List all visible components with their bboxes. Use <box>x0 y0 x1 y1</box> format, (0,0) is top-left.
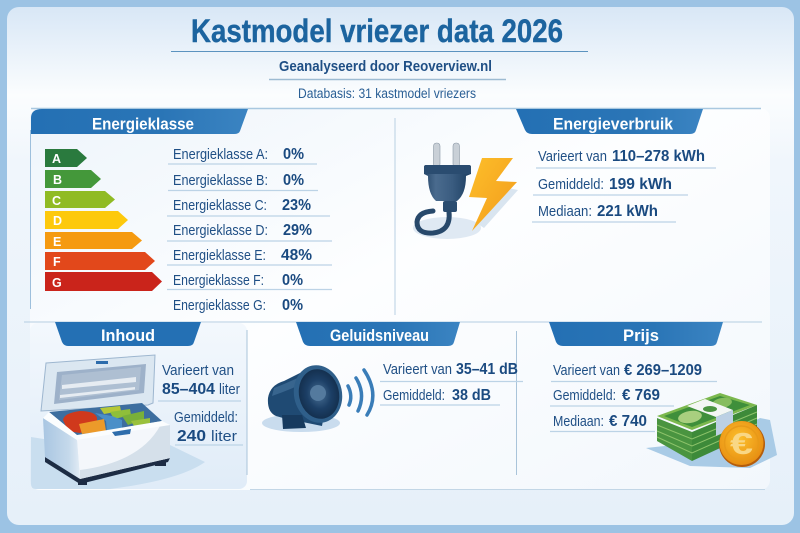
panel: Energieverbruik <box>413 109 716 239</box>
energy class rows: Energieklasse G: <box>173 298 266 314</box>
energy class rows: 0% <box>282 272 303 289</box>
capacity stats: Varieert van <box>162 363 234 379</box>
energy consumption stats: Mediaan: <box>538 204 592 220</box>
energy class rows: Energieklasse E: <box>173 248 266 264</box>
energy consumption stats: 221 kWh <box>597 203 658 220</box>
icon: plug and lightning bolt <box>413 143 518 239</box>
icon: speaker with sound waves <box>262 361 373 432</box>
subtitle: Geanalyseerd door Reoverview.nl <box>279 58 492 75</box>
tab: Inhoud: Inhoud <box>101 326 155 345</box>
energy class rows: Energieklasse A: <box>173 147 268 163</box>
tab: Energieklasse <box>31 109 248 134</box>
icon: chest freezer <box>31 355 205 489</box>
energy class rows: Energieklasse F: <box>173 273 264 289</box>
energy consumption stats <box>532 148 716 222</box>
capacity stats: liter <box>219 382 240 398</box>
energy label arrows: C <box>52 194 61 208</box>
tab: Inhoud <box>55 322 201 346</box>
price stats <box>550 362 717 432</box>
tab: Energieverbruik <box>516 109 703 134</box>
energy consumption stats: 110–278 kWh <box>612 148 705 165</box>
price stats: Varieert van <box>553 363 620 379</box>
icon: banknotes and euro coin: € <box>730 426 753 461</box>
tab: Geluidsniveau: Geluidsniveau <box>330 326 429 345</box>
panel: Energieklasse <box>31 109 332 314</box>
lower left panel tint <box>30 323 247 489</box>
energy label arrows: A <box>52 152 61 166</box>
energy class rows: 29% <box>283 222 312 239</box>
capacity stats: Gemiddeld: <box>174 410 238 426</box>
energy class rows: 0% <box>283 172 304 189</box>
tab: Energieklasse: Energieklasse <box>92 114 194 134</box>
tab: Prijs: Prijs <box>623 326 659 345</box>
energy class rows: Energieklasse C: <box>173 198 267 214</box>
database note: Databasis: 31 kastmodel vriezers <box>298 86 476 101</box>
energy label arrows: B <box>53 173 62 187</box>
energy class rows: Energieklasse B: <box>173 173 268 189</box>
energy label arrows: E <box>53 235 61 249</box>
panel: Prijs <box>549 322 777 468</box>
tab: Prijs <box>549 322 723 346</box>
energy consumption stats: Varieert van <box>538 149 607 165</box>
tab: Geluidsniveau <box>296 322 460 346</box>
energy class rows: 48% <box>281 247 312 264</box>
energy label arrows: G <box>52 276 62 290</box>
energy class rows: 23% <box>282 197 311 214</box>
capacity stats: 85–404 <box>162 381 215 398</box>
title: Kastmodel vriezer data 2026 <box>191 13 563 49</box>
price stats: € 769 <box>622 387 660 404</box>
energy class rows: Energieklasse D: <box>173 223 268 239</box>
energy class rows: 0% <box>282 297 303 314</box>
price stats: € 740 <box>609 413 647 430</box>
panel: Geluidsniveau <box>262 322 523 432</box>
icon: banknotes and euro coin <box>646 393 777 468</box>
energy label arrows: D <box>53 214 62 228</box>
sound level stats: Gemiddeld: <box>383 388 445 404</box>
panel: Inhoud <box>31 322 243 489</box>
energy label arrows <box>45 149 162 291</box>
price stats: Gemiddeld: <box>553 388 616 404</box>
sound level stats <box>380 361 523 405</box>
energy class rows: 0% <box>283 146 304 163</box>
energy consumption stats: Gemiddeld: <box>538 177 604 193</box>
capacity stats: liter <box>211 429 237 445</box>
sound level stats: Varieert van <box>383 362 452 378</box>
panel area background <box>30 108 770 490</box>
capacity stats: 240 <box>177 428 206 445</box>
price stats: € 269–1209 <box>624 362 702 379</box>
capacity stats <box>158 363 243 445</box>
sound level stats: 38 dB <box>452 387 491 404</box>
price stats: Mediaan: <box>553 414 604 430</box>
energy label arrows: F <box>53 255 61 269</box>
sound level stats: 35–41 dB <box>456 361 518 378</box>
energy consumption stats: 199 kWh <box>609 176 672 193</box>
energy class rows <box>167 146 332 314</box>
tab: Energieverbruik: Energieverbruik <box>553 114 673 134</box>
